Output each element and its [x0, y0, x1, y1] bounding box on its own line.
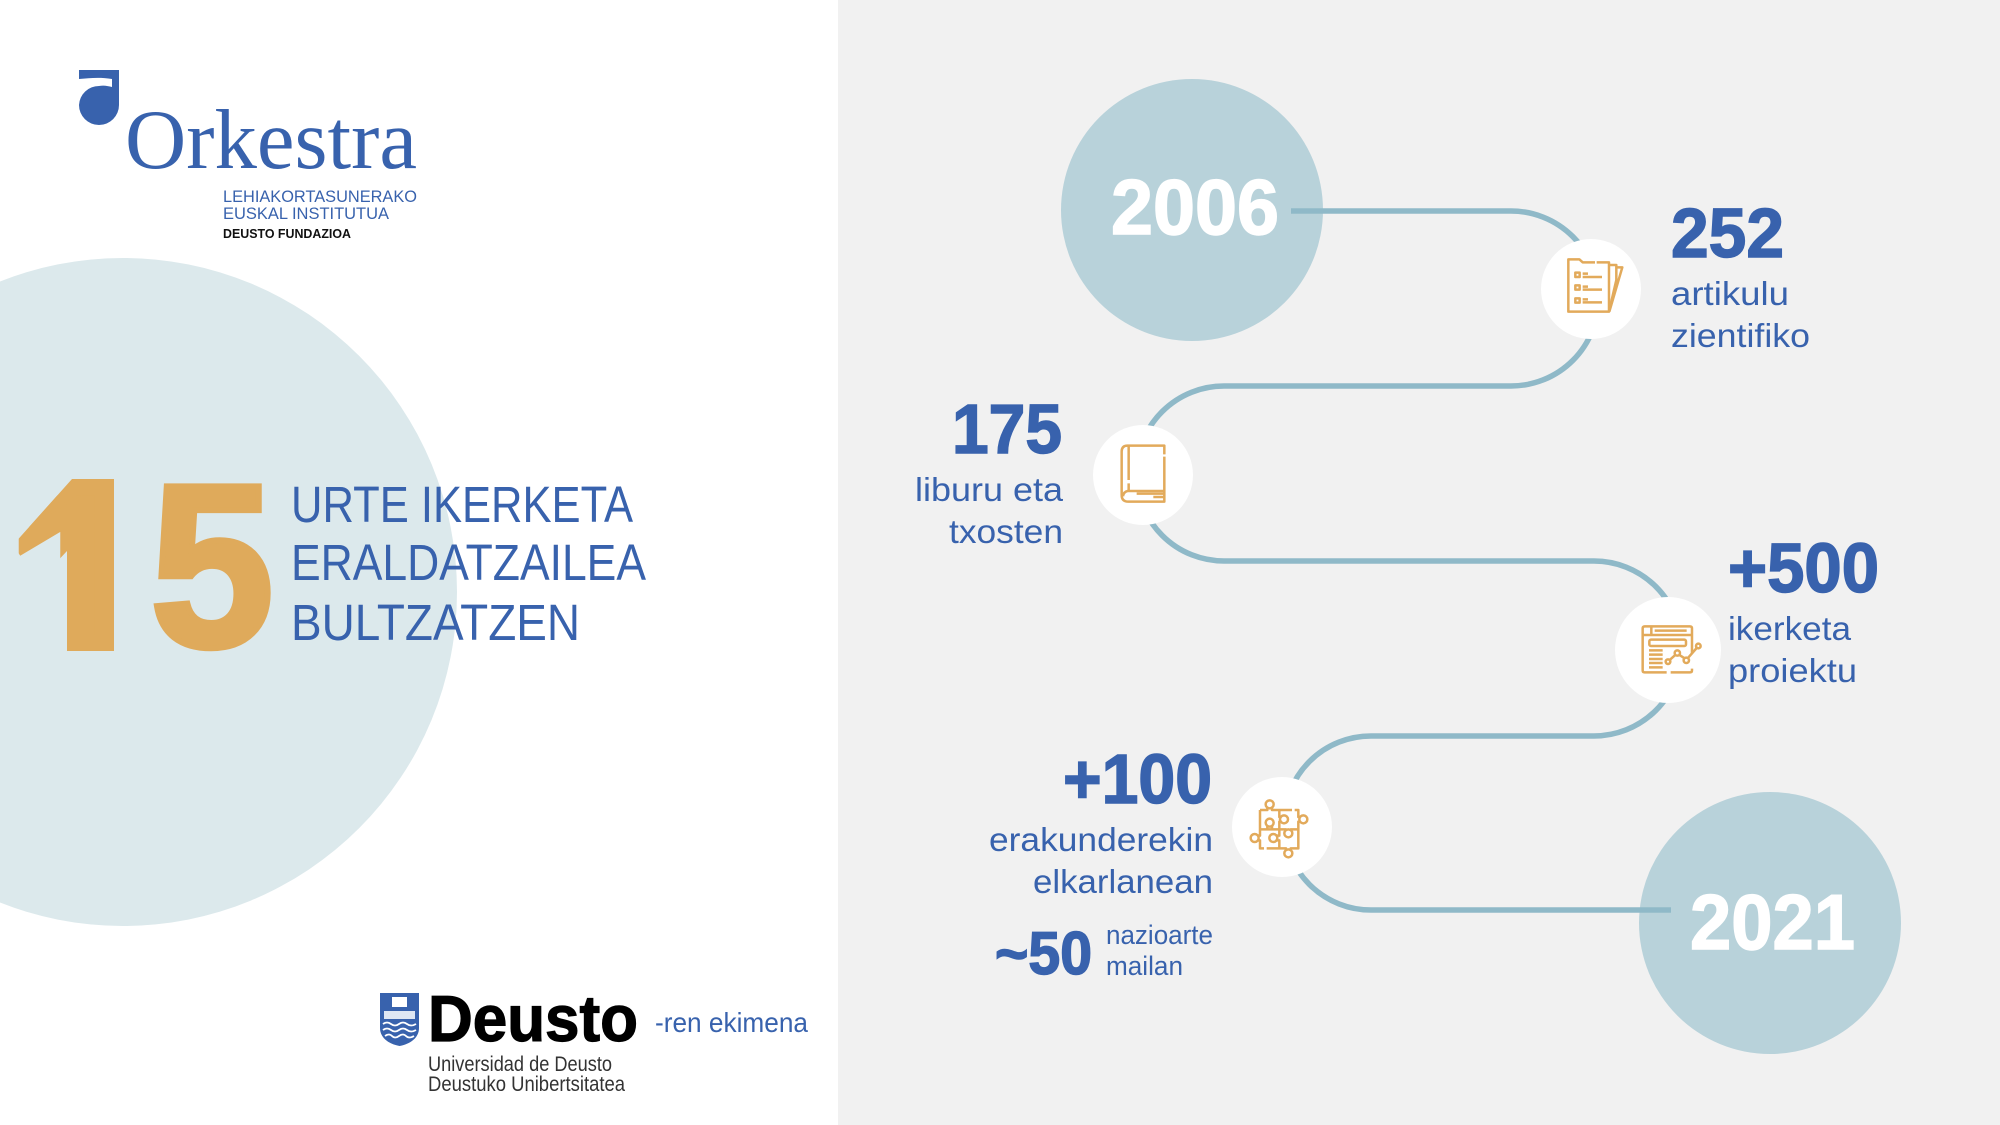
stat label line 1: erakunderekin [989, 821, 1213, 858]
icon: musical note [79, 70, 119, 125]
icon: book [1093, 425, 1193, 525]
logo subtitle line 1: LEHIAKORTASUNERAKO [223, 187, 417, 206]
stat label line 2: mailan [1106, 951, 1183, 981]
logo foundation line: DEUSTO FUNDAZIOA [223, 226, 352, 241]
decorative large circle behind headline [0, 258, 457, 926]
stat number: 252 [1671, 194, 1784, 272]
digit 5: 5 [150, 437, 274, 696]
stat label line 1: nazioarte [1106, 920, 1213, 950]
timeline path [1136, 211, 1681, 910]
logo subtitle line 2: EUSKAL INSTITUTUA [223, 204, 390, 223]
stat number: +500 [1728, 529, 1879, 607]
stat: +500 ikerketa proiektu [1728, 529, 1879, 689]
icon: research report chart [1615, 597, 1721, 703]
logo: Universidad de Deusto [380, 982, 808, 1096]
stat label line 1: artikulu [1671, 275, 1789, 312]
university name line 2: Deustuko Unibertsitatea [428, 1073, 625, 1096]
stat: 252 artikulu zientifiko [1671, 194, 1810, 354]
stat: ~50 nazioarte mailan [995, 920, 1213, 987]
digit 1: 1 [12, 434, 152, 702]
year circle 2006 [1061, 79, 1323, 341]
logo: Orkestra [79, 70, 417, 241]
icon: documents [1541, 239, 1641, 339]
icon: puzzle [1232, 777, 1332, 877]
Deusto wordmark: Deusto [428, 982, 638, 1055]
headline line 3: BULTZATZEN [291, 594, 580, 651]
stat label line 2: zientifiko [1671, 317, 1810, 354]
stat: 175 liburu eta txosten [915, 390, 1064, 550]
panel: left white background [0, 0, 838, 1125]
stat label line 1: liburu eta [915, 471, 1064, 508]
initiative label: -ren ekimena [655, 1007, 808, 1038]
stat label line 2: elkarlanean [1033, 863, 1213, 900]
year circle 2021 [1639, 792, 1901, 1054]
stat label line 2: proiektu [1728, 652, 1857, 689]
headline line 1: URTE IKERKETA [291, 476, 633, 533]
stat label line 2: txosten [949, 513, 1063, 550]
icon: Deusto shield [380, 993, 419, 1046]
headline [291, 476, 646, 651]
stat label line 1: ikerketa [1728, 610, 1852, 647]
university name line 1: Universidad de Deusto [428, 1053, 612, 1076]
year label 2021: 2021 [1690, 878, 1855, 966]
headline line 2: ERALDATZAILEA [291, 534, 646, 591]
stat number: +100 [1063, 740, 1212, 818]
stat: +100 erakunderekin elkarlanean [989, 740, 1213, 900]
panel: right grey background [838, 0, 2000, 1125]
stat number: ~50 [995, 920, 1092, 987]
year label 2006: 2006 [1111, 163, 1279, 251]
stat number: 175 [952, 390, 1062, 468]
logo wordmark: Orkestra [125, 93, 417, 187]
big number 15 [18, 479, 271, 652]
